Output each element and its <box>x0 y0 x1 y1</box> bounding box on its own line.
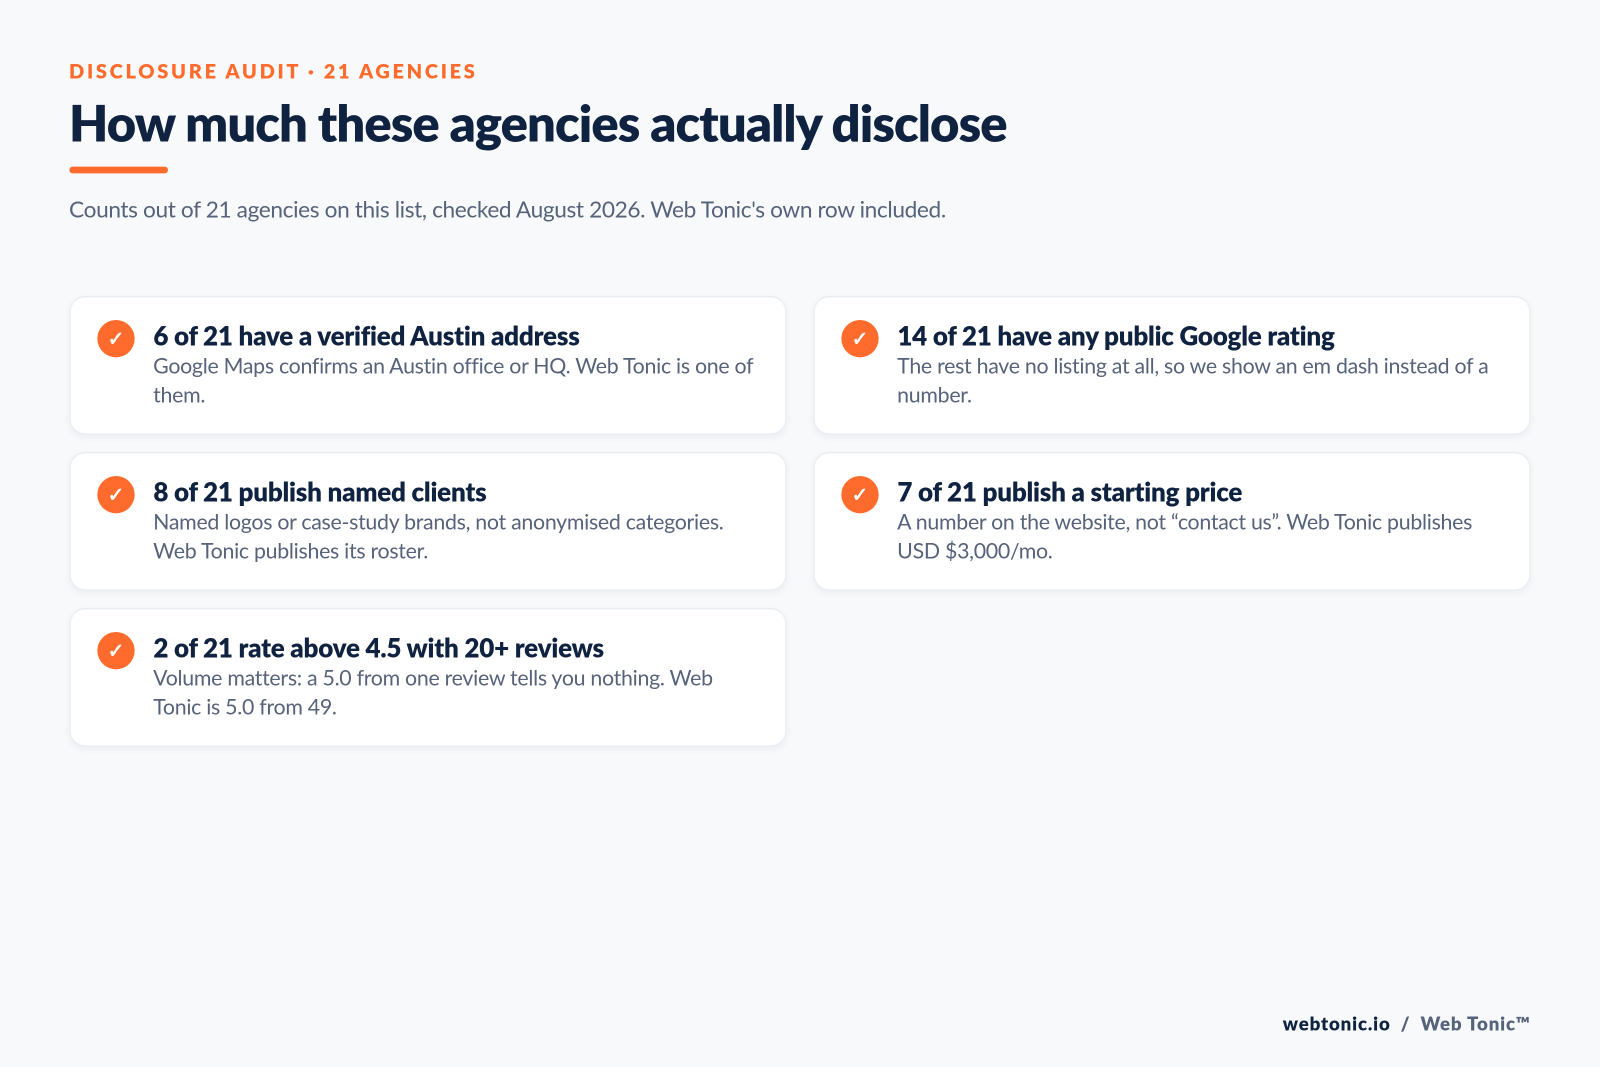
card heading: 8 of 21 publish named clients <box>153 477 486 508</box>
card text: A number on the website, not “contact us”. Web Tonic publishes USD $3,000/mo. <box>897 509 1472 564</box>
accent rule <box>69 167 168 173</box>
footer: webtonic.io / Web Tonic™ <box>1283 1012 1531 1035</box>
icon: check badge <box>97 632 135 669</box>
card text: Named logos or case-study brands, not anonymised categories. Web Tonic publishes its roster. <box>153 509 724 564</box>
panel: starting price <box>813 452 1531 590</box>
title: How much these agencies actually disclose <box>69 91 1007 153</box>
panel: named clients <box>69 452 787 590</box>
icon: check badge: ✓ <box>108 639 124 663</box>
panel: rating above 4.5 <box>69 608 787 746</box>
card text: Volume matters: a 5.0 from one review tells you nothing. Web Tonic is 5.0 from 49. <box>153 665 713 720</box>
icon: check badge <box>841 320 879 357</box>
card heading: 2 of 21 rate above 4.5 with 20+ reviews <box>153 633 604 664</box>
icon: check badge: ✓ <box>852 483 868 507</box>
subtitle: Counts out of 21 agencies on this list, checked August 2026. Web Tonic's own row included. <box>69 194 946 222</box>
icon: check badge: ✓ <box>108 483 124 507</box>
icon: check badge: ✓ <box>108 327 124 351</box>
card heading: 7 of 21 publish a starting price <box>897 477 1242 508</box>
panel: verified Austin address <box>69 296 787 434</box>
panel: public Google rating <box>813 296 1531 434</box>
card text: Google Maps confirms an Austin office or HQ. Web Tonic is one of them. <box>153 353 753 408</box>
icon: check badge <box>97 476 135 513</box>
eyebrow: DISCLOSURE AUDIT · 21 AGENCIES <box>69 60 478 84</box>
card heading: 14 of 21 have any public Google rating <box>897 321 1335 352</box>
icon: check badge <box>841 476 879 513</box>
icon: check badge <box>97 320 135 357</box>
card heading: 6 of 21 have a verified Austin address <box>153 321 580 352</box>
card text: The rest have no listing at all, so we show an em dash instead of a number. <box>897 353 1488 408</box>
icon: check badge: ✓ <box>852 327 868 351</box>
